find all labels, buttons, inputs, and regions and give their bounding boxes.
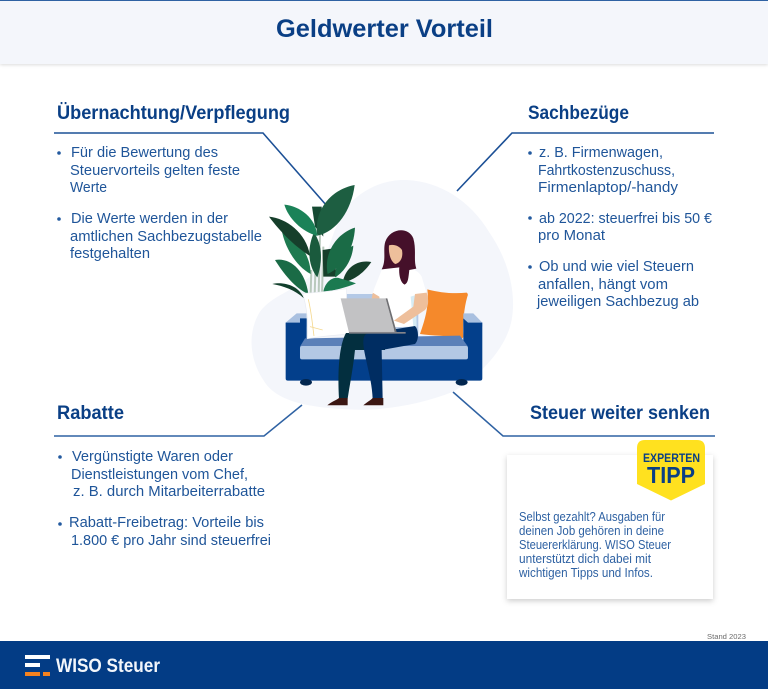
- hair: [382, 230, 416, 285]
- forward arm: [394, 293, 428, 324]
- card text: Steuererklärung. WISO Steuer: [519, 538, 671, 552]
- background blob: [252, 180, 513, 410]
- tip card: [507, 455, 713, 599]
- card text: deinen Job gehören in deine: [519, 524, 664, 538]
- illustration: woman with laptop on sofa: [252, 180, 513, 410]
- torso: [373, 267, 427, 327]
- logo icon: [25, 655, 50, 676]
- far leg: [338, 333, 387, 399]
- bullet list: jeweiligen Sachbezug ab: [536, 293, 699, 310]
- card text: wichtigen Tipps und Infos.: [518, 566, 653, 580]
- bullet list: Dienstleistungen vom Chef,: [71, 466, 248, 483]
- bullet list: Werte: [70, 179, 107, 196]
- bullet list: Steuervorteils gelten feste: [70, 162, 240, 179]
- heading: Übernachtung/Verpflegung: [57, 101, 290, 124]
- heading: Rabatte: [57, 402, 124, 424]
- shoes: [327, 398, 348, 405]
- heading: Sachbezüge: [528, 102, 629, 124]
- bullet list: Vergünstigte Waren oder: [72, 448, 233, 465]
- connector line: Übernachtung: [54, 133, 341, 222]
- sofa body: [286, 313, 482, 386]
- header band: [0, 0, 768, 64]
- connector line: Steuer weiter senken: [453, 392, 715, 436]
- bullet list: [528, 144, 713, 310]
- bullet list: [58, 448, 271, 549]
- plant: [269, 185, 371, 298]
- heading: Steuer weiter senken: [530, 402, 710, 424]
- panel: Steuer weiter senken: [507, 402, 713, 599]
- bullet list: amtlichen Sachbezugstabelle: [70, 228, 262, 245]
- card text: unterstützt dich dabei mit: [519, 552, 651, 566]
- face: [389, 245, 402, 264]
- arm behind: [372, 291, 383, 300]
- panel: Übernachtung/Verpflegung: [57, 101, 290, 262]
- bullet list: Firmenlaptop/-handy: [538, 179, 679, 196]
- bullet list: Rabatt-Freibetrag: Vorteile bis: [69, 514, 264, 531]
- laptop: [341, 298, 406, 334]
- bullet list: Für die Bewertung des: [71, 144, 218, 161]
- panel: Rabatte: [57, 402, 271, 549]
- bullet list: z. B. Firmenwagen,: [539, 144, 663, 161]
- bullet list: Fahrtkostenzuschuss,: [538, 162, 675, 179]
- logo wordmark: WISO Steuer: [56, 656, 161, 677]
- badge: Experten Tipp: [637, 440, 705, 500]
- date note: Stand 2023: [707, 632, 746, 641]
- orange pillow: [420, 289, 468, 339]
- bullet list: [57, 144, 262, 262]
- title: Geldwerter Vorteil: [276, 15, 493, 43]
- near leg: [363, 326, 418, 399]
- badge: Experten Tipp: EXPERTEN: [643, 451, 700, 465]
- bullet list: z. B. durch Mitarbeiterrabatte: [73, 483, 265, 500]
- panel: Sachbezüge: [528, 102, 713, 310]
- connector line: Sachbezüge: [457, 133, 714, 191]
- footer band: [0, 641, 768, 689]
- connector line: Rabatte: [54, 405, 302, 436]
- bullet list: ab 2022: steuerfrei bis 50 €: [539, 210, 713, 227]
- sofa back: [347, 294, 418, 337]
- bullet list: anfallen, hängt vom: [538, 276, 668, 293]
- bullet list: festgehalten: [70, 245, 150, 262]
- woman: [327, 230, 428, 405]
- bullet list: pro Monat: [538, 227, 606, 244]
- card text: [518, 510, 671, 580]
- bullet list: Ob und wie viel Steuern: [539, 258, 694, 275]
- bullet list: Die Werte werden in der: [71, 210, 228, 227]
- bullet list: 1.800 € pro Jahr sind steuerfrei: [71, 532, 271, 549]
- card text: Selbst gezahlt? Ausgaben für: [519, 510, 665, 524]
- badge: Experten Tipp: TIPP: [647, 462, 695, 488]
- white pillow: [303, 289, 351, 339]
